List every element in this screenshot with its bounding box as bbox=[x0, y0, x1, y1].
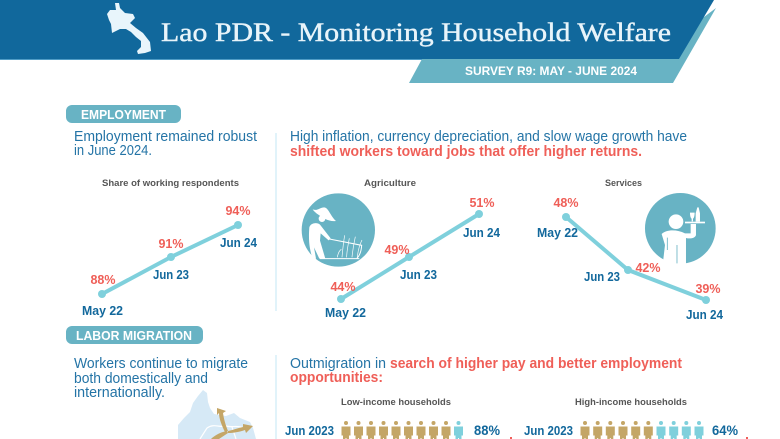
chart: services: 48% bbox=[553, 196, 579, 210]
text: outmigration: opportunities: bbox=[290, 370, 383, 386]
chart: services: Services bbox=[605, 178, 642, 189]
chart: services: 42% bbox=[635, 261, 661, 275]
chart: services: Jun 24 bbox=[686, 308, 723, 322]
pictogram: high-income households bbox=[524, 397, 738, 439]
pictogram: high-income households: High-income households bbox=[575, 397, 687, 408]
chart: services: 39% bbox=[695, 282, 721, 296]
map: migration flows bbox=[178, 390, 256, 439]
chart: agriculture: Jun 24 bbox=[463, 226, 500, 240]
chart: services bbox=[537, 178, 723, 322]
chart: share of working respondents: Jun 24 bbox=[220, 236, 257, 250]
section label: employment: EMPLOYMENT bbox=[81, 108, 166, 122]
pictogram: low-income households: Low-income households bbox=[341, 397, 451, 408]
subtitle ribbon bbox=[409, 8, 716, 83]
title bar bbox=[0, 0, 714, 59]
title: Lao PDR - Monitoring Household Welfare bbox=[161, 18, 671, 47]
arrow tips: change markers bbox=[510, 437, 748, 439]
text: migration summary: both domestically and bbox=[74, 371, 208, 387]
chart: share of working respondents: 88% bbox=[90, 273, 116, 287]
chart: share of working respondents bbox=[82, 178, 257, 318]
section label: employment bbox=[66, 105, 181, 123]
chart: agriculture: 44% bbox=[330, 280, 356, 294]
chart: agriculture: Agriculture bbox=[364, 178, 416, 189]
text: shift to higher returns bbox=[290, 129, 687, 160]
chart: agriculture: 49% bbox=[384, 243, 410, 257]
text: employment summary bbox=[74, 129, 257, 159]
chart: agriculture: 51% bbox=[469, 196, 495, 210]
text: shift to higher returns: shifted workers toward jobs that offer higher returns. bbox=[290, 144, 642, 160]
header banner bbox=[0, 0, 716, 83]
section label: labor migration: LABOR MIGRATION bbox=[76, 329, 192, 343]
chart: services: May 22 bbox=[537, 226, 578, 240]
pictogram: low-income households bbox=[285, 397, 500, 439]
icon: Laos map bbox=[107, 3, 151, 54]
chart: agriculture bbox=[325, 178, 500, 320]
pictogram: low-income households: 88% bbox=[474, 423, 500, 438]
section label: labor migration bbox=[66, 326, 203, 344]
text: migration summary: internationally. bbox=[74, 385, 165, 401]
text: migration summary bbox=[74, 356, 248, 401]
chart: agriculture: Jun 23 bbox=[400, 268, 437, 282]
text: shift to higher returns: High inflation, currency depreciation, and slow wage growth have bbox=[290, 129, 687, 145]
chart: share of working respondents: Share of working respondents bbox=[102, 178, 239, 189]
chart: agriculture: May 22 bbox=[325, 306, 366, 320]
chart: share of working respondents: May 22 bbox=[82, 304, 123, 318]
chart: share of working respondents: 91% bbox=[158, 237, 184, 251]
text: outmigration: Outmigration in bbox=[290, 356, 386, 372]
text: outmigration bbox=[290, 356, 682, 386]
subtitle ribbon: SURVEY R9: MAY - JUNE 2024 bbox=[465, 64, 637, 78]
text: outmigration: search of higher pay and better employment bbox=[390, 356, 682, 372]
text: migration summary: Workers continue to migrate bbox=[74, 356, 248, 372]
chart: services: Jun 23 bbox=[584, 270, 620, 284]
chart: share of working respondents: 94% bbox=[225, 204, 251, 218]
text: employment summary: in June 2024. bbox=[74, 143, 152, 159]
pictogram: low-income households: Jun 2023 bbox=[285, 424, 334, 438]
pictogram: high-income households: 64% bbox=[712, 423, 738, 438]
chart: share of working respondents: Jun 23 bbox=[153, 268, 189, 282]
text: employment summary: Employment remained robust bbox=[74, 129, 257, 145]
icon: farmer bbox=[302, 193, 375, 267]
pictogram: high-income households: Jun 2023 bbox=[524, 424, 573, 438]
icon: waiter bbox=[645, 193, 716, 265]
